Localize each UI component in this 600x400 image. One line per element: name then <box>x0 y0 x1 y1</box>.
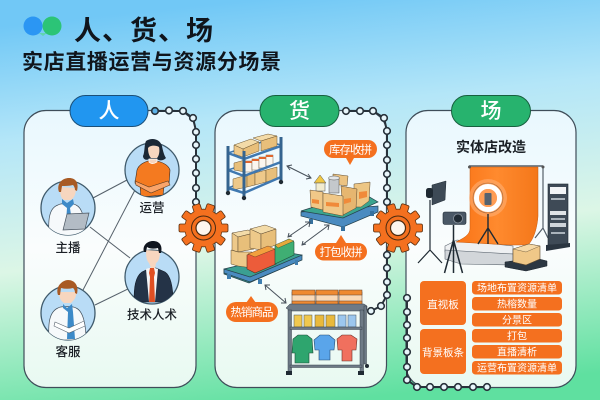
camera on tripod <box>443 212 466 273</box>
pill: people: 人 <box>98 100 120 123</box>
panel: venue <box>406 110 576 388</box>
chain: gear to retail shelf <box>368 250 390 314</box>
title: 人、货、场 <box>74 16 214 46</box>
backdrop <box>456 166 548 245</box>
warehouse rack <box>226 134 283 200</box>
retail shelf <box>286 290 369 375</box>
arrow: rack to pallet <box>287 165 311 179</box>
logo icon <box>24 16 62 36</box>
photo studio illustration <box>418 166 570 273</box>
group: background board: 直播清析 <box>497 346 537 358</box>
platform <box>445 240 513 265</box>
label: technician: 技术人术 <box>127 307 177 322</box>
group: background board <box>420 329 562 374</box>
equipment rack <box>546 184 570 251</box>
panel: goods <box>215 110 386 388</box>
label: host: 主播 <box>55 241 81 255</box>
chain: goods to gear <box>343 108 390 205</box>
callout: inventory <box>324 140 377 165</box>
callout: packing: 打包收拼 <box>320 245 362 259</box>
heading: store renovation: 实体店改造 <box>456 139 526 155</box>
callout: packing <box>315 235 367 260</box>
chain: people to gear <box>152 107 199 205</box>
group: background board: 运营布置资源清单 <box>477 362 557 374</box>
avatar: host <box>41 178 95 237</box>
group: background board: 背景板条 <box>422 346 464 359</box>
callout: hot products: 热销商品 <box>230 305 274 319</box>
laptop <box>63 213 89 230</box>
arrow: packing to retail shelf <box>265 285 286 303</box>
connection lines <box>83 180 135 305</box>
box on stand <box>505 244 547 271</box>
subtitle: 实店直播运营与资源分场景 <box>22 50 281 74</box>
resource table <box>420 281 562 374</box>
label: operations: 运营 <box>139 200 165 215</box>
pallet with boxes <box>301 174 378 231</box>
group: direct view board: 分景区 <box>502 314 532 326</box>
clothes on rack <box>292 335 357 363</box>
gear: right <box>374 203 422 253</box>
avatar: technician <box>125 241 179 304</box>
group: direct view board: 场地布置资源清单 <box>477 282 557 294</box>
pill: goods: 货 <box>289 100 310 123</box>
packing pallet <box>224 225 302 284</box>
group: direct view board: 直视板 <box>427 298 459 311</box>
callout: hot products <box>226 296 278 322</box>
group: direct view board <box>420 281 562 326</box>
pill: venue: 场 <box>480 100 502 123</box>
panel: people <box>24 110 196 388</box>
arrows: pallet to packing <box>288 222 329 245</box>
group: background board: 打包 <box>507 330 527 342</box>
chain: venue border <box>404 295 490 390</box>
ring light <box>469 179 507 244</box>
group: direct view board: 热榕数量 <box>497 298 537 310</box>
callout: inventory: 库存收拼 <box>329 142 372 156</box>
avatar: operations woman <box>125 139 179 197</box>
avatar: customer service <box>41 280 95 340</box>
pill: goods <box>260 96 339 126</box>
pill: venue <box>452 96 530 126</box>
gear: left <box>179 203 228 253</box>
pill: people <box>70 96 148 126</box>
softbox light <box>418 181 446 263</box>
label: customer service: 客服 <box>55 344 81 359</box>
